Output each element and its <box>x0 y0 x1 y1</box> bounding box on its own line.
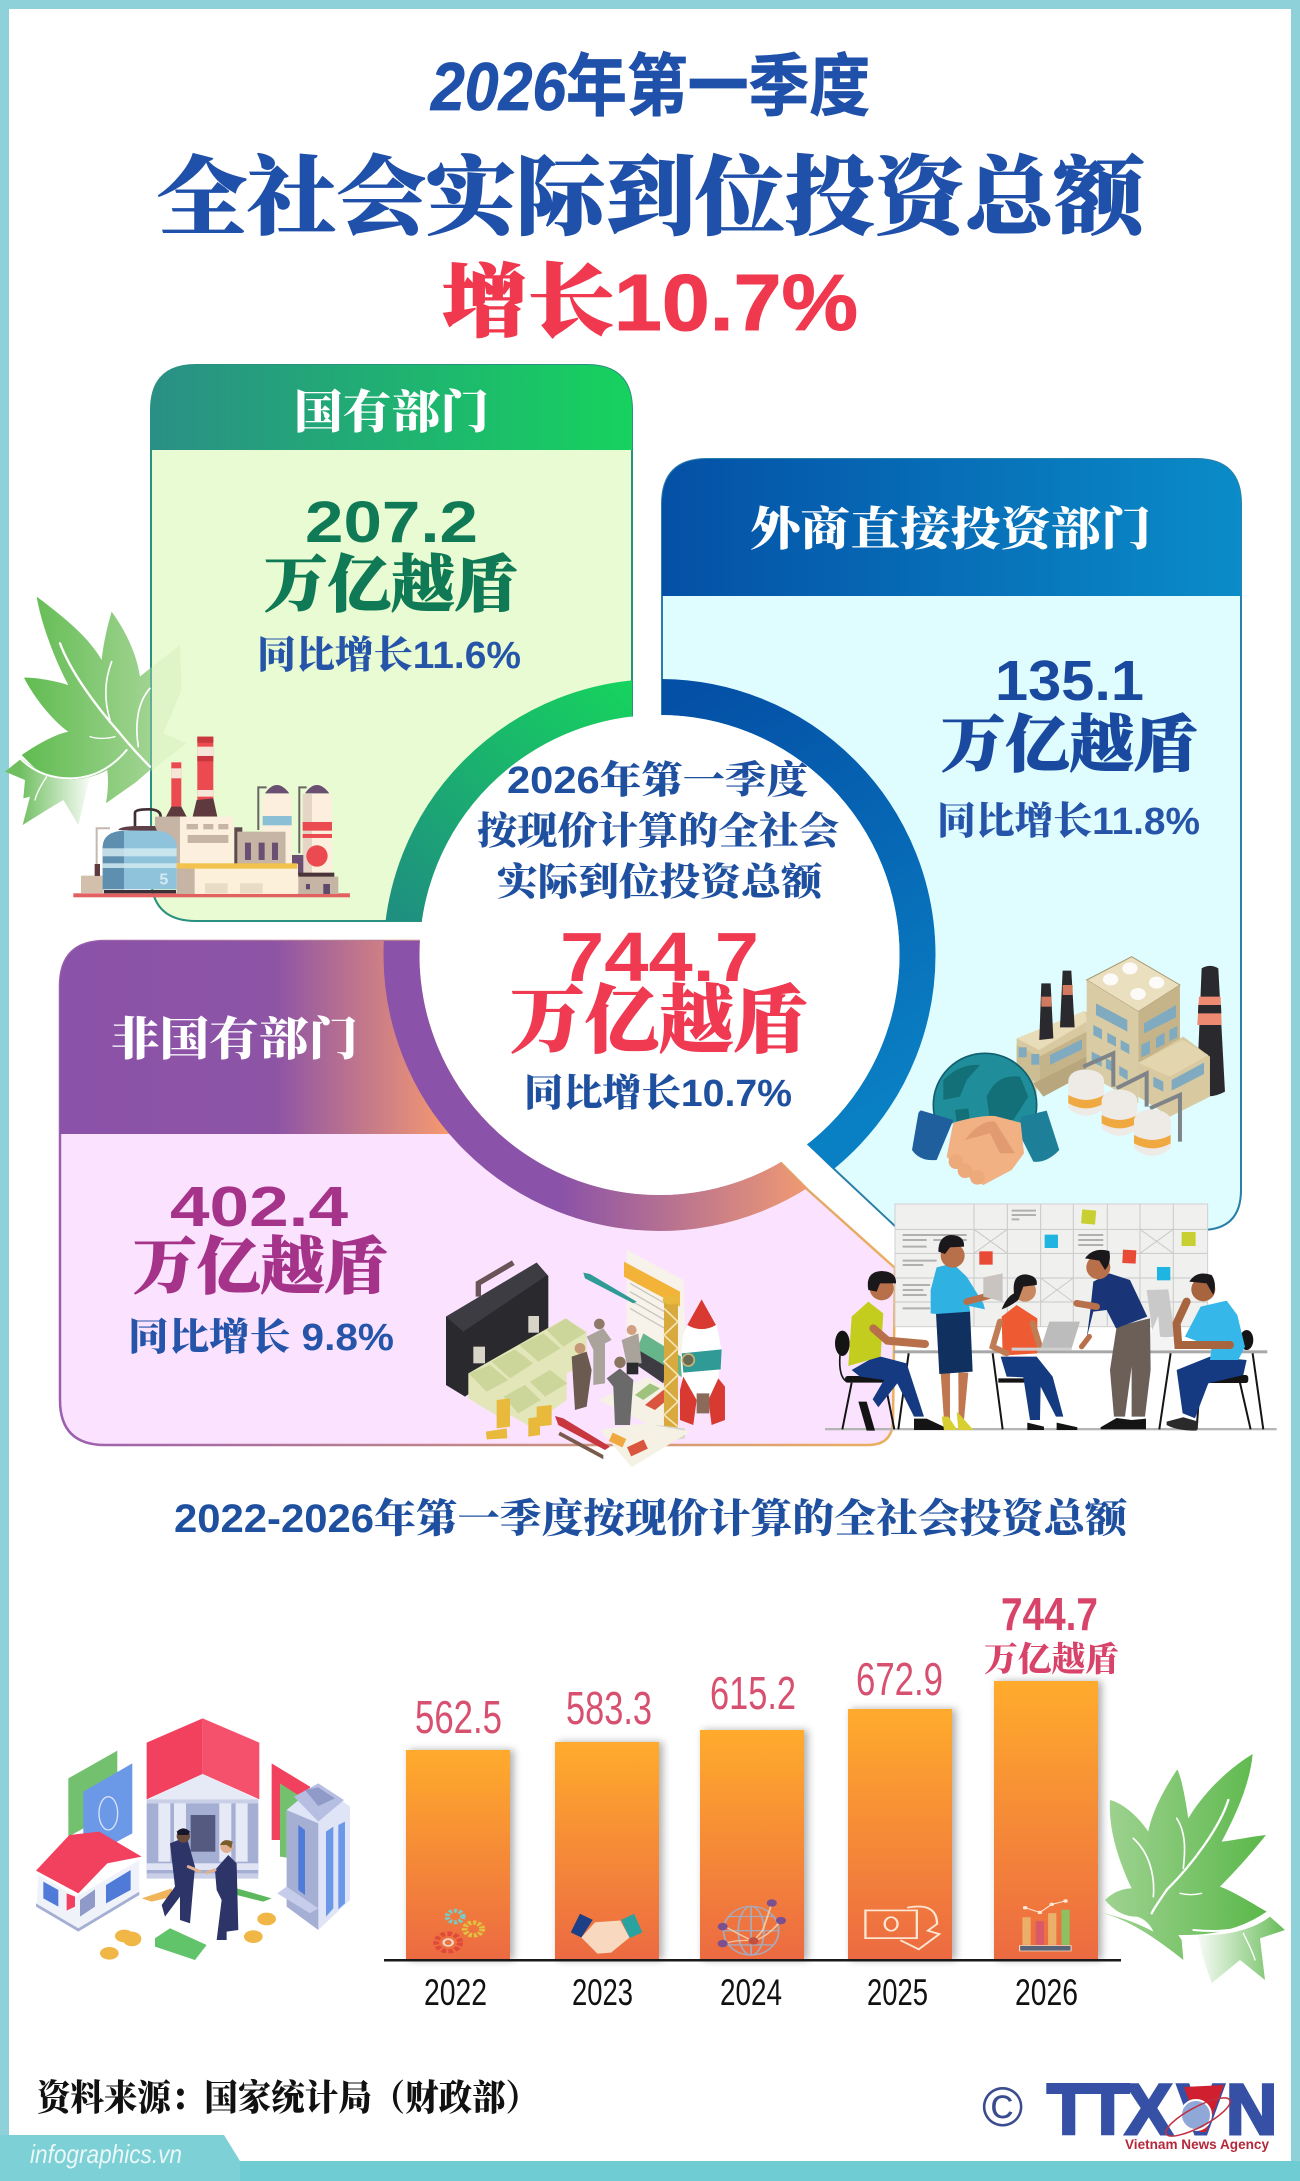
website tab <box>0 2135 240 2181</box>
bar 2026: 万亿越盾 <box>984 1641 1119 1679</box>
icon: top-left leaf <box>5 597 187 825</box>
text: centre total: 744.7 <box>560 918 759 996</box>
text: foreign sector: 同比增长11.8% <box>937 801 1200 843</box>
icon: team at planning board <box>825 1204 1277 1431</box>
icon: cash in hand <box>865 1907 939 1949</box>
bar 2025 <box>848 1653 952 2013</box>
text: foreign sector: 万亿越盾 <box>941 711 1198 780</box>
bar 2022 <box>406 1691 510 2013</box>
bar 2022: 2022 <box>424 1972 487 2013</box>
text: centre total: 2026年第一季度 <box>507 759 808 802</box>
logo: TTXVN: Vietnam News Agency <box>1125 2136 1269 2152</box>
bar 2024: 615.2 <box>710 1667 796 1719</box>
title: 全社会实际到位投资总额 <box>157 150 1150 246</box>
icons inside bars <box>436 1899 1071 1955</box>
icon: gears <box>436 1911 482 1951</box>
centre white circle <box>420 715 900 1195</box>
rocket <box>680 1299 725 1425</box>
logo: TTXVN: © <box>982 2075 1023 2138</box>
text: state sector <box>257 386 521 677</box>
text: foreign sector: 135.1 <box>995 649 1144 713</box>
source note: 资料来源：国家统计局（财政部） <box>37 2077 539 2118</box>
illustration backing: white under team <box>897 1328 1280 1432</box>
icon: factory <box>73 737 350 897</box>
icon: bar chart growth <box>1020 1899 1071 1951</box>
text: centre total: 同比增长10.7% <box>524 1073 792 1115</box>
title: 增长10.7% <box>442 258 858 347</box>
bar 2023 <box>555 1682 659 2013</box>
text: state sector: 同比增长11.6% <box>257 635 521 677</box>
state sector header <box>151 365 632 450</box>
text: foreign sector <box>750 503 1200 843</box>
donut ring: blue arc <box>662 679 936 1169</box>
icon: bottom-right leaf <box>1097 1754 1285 1983</box>
text: centre total: 万亿越盾 <box>510 979 808 1062</box>
chart heading: 2022-2026年第一季度按现价计算的全社会投资总额 <box>174 1496 1130 1541</box>
text: state sector: 万亿越盾 <box>264 551 518 620</box>
icon: globe, handshake and factory buildings <box>912 957 1225 1185</box>
website tab: infographics.vn <box>30 2139 182 2169</box>
text: non-state sector <box>110 1013 394 1359</box>
icon: briefcase, money, contract, people and rocket <box>446 1250 725 1467</box>
text: non-state sector: 同比增长 9.8% <box>128 1317 394 1359</box>
title: 2026年第一季度 <box>429 49 870 125</box>
bar 2026 <box>984 1588 1119 2013</box>
chart axis <box>384 1959 1121 1962</box>
bar chart <box>384 1588 1121 2013</box>
text: non-state sector: 非国有部门 <box>110 1013 358 1065</box>
donut ring: green arc <box>386 680 632 921</box>
monitor <box>1147 1289 1175 1338</box>
bar 2025: 2025 <box>867 1972 928 2013</box>
text: non-state sector: 万亿越盾 <box>133 1233 388 1302</box>
non-state sector header <box>60 941 560 1134</box>
seated man in light blue <box>1167 1273 1253 1431</box>
bar 2023: 583.3 <box>566 1682 652 1734</box>
bar 2024 <box>700 1667 804 2013</box>
leaning man in navy <box>1077 1250 1151 1429</box>
bar 2023: 2023 <box>572 1972 633 2013</box>
bar 2026: 744.7 <box>1001 1588 1098 1640</box>
bar 2025: 672.9 <box>856 1653 943 1705</box>
standing woman in blue <box>931 1235 1003 1430</box>
text: centre total <box>477 759 840 1115</box>
panel: foreign direct investment sector <box>662 459 1241 1230</box>
text: state sector: 国有部门 <box>294 386 489 438</box>
seated man in yellow <box>835 1271 945 1431</box>
text: non-state sector: 402.4 <box>170 1175 348 1239</box>
bar 2022: 562.5 <box>415 1691 502 1743</box>
text: centre total: 实际到位投资总额 <box>497 862 825 904</box>
donut ring: purple arc <box>384 941 806 1231</box>
icon: factory: 5 <box>159 872 168 889</box>
text: foreign sector: 外商直接投资部门 <box>750 503 1151 555</box>
seated woman in red <box>993 1274 1080 1430</box>
logo: TTXVN: TTXVN <box>1047 2071 1277 2150</box>
text: centre total: 按现价计算的全社会 <box>477 811 840 853</box>
icon: handshake <box>571 1914 642 1954</box>
foreign sector header <box>662 459 1241 596</box>
text: state sector: 207.2 <box>305 490 478 555</box>
panel: non-state sector <box>60 941 895 1445</box>
panel: state sector <box>151 365 632 921</box>
bar 2024: 2024 <box>720 1972 782 2013</box>
icon: bank and handshake <box>36 1718 350 1960</box>
businesspeople <box>572 1319 642 1425</box>
icon: globe network <box>718 1899 786 1955</box>
title <box>157 49 1150 347</box>
bar 2026: 2026 <box>1015 1972 1078 2013</box>
